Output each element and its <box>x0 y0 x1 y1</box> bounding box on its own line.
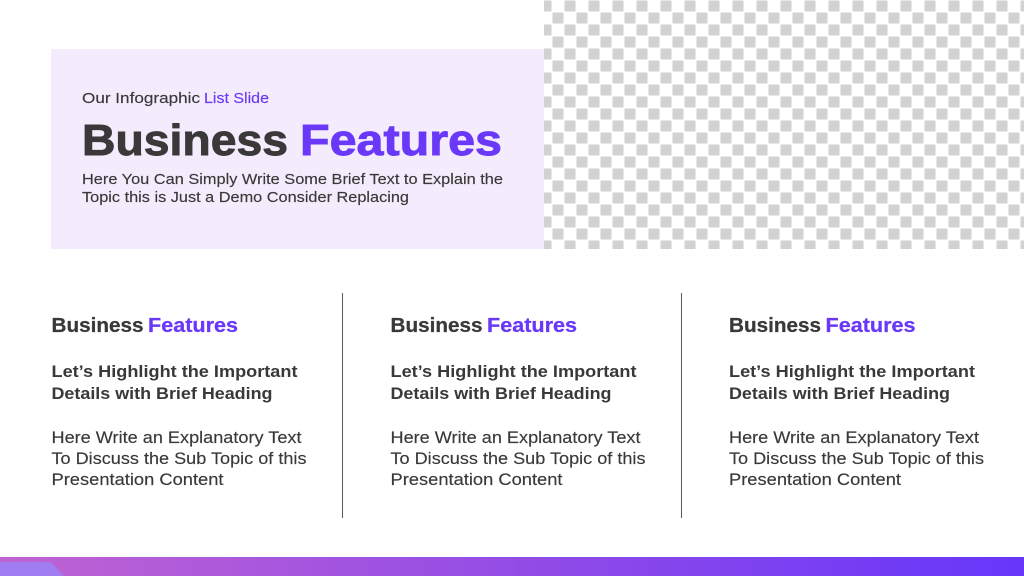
column 2 body text: To Discuss the Sub Topic of this <box>390 450 646 468</box>
divider 2 <box>681 293 682 518</box>
column 3 heading: Business <box>729 315 821 337</box>
eyebrow text: List Slide <box>204 90 269 107</box>
column 2 heading: Features <box>487 315 577 337</box>
column 2 subheading <box>390 363 637 403</box>
column 1 heading: Business <box>52 315 144 337</box>
column 2 body text: Presentation Content <box>390 471 563 489</box>
column 2 subheading: Details with Brief Heading <box>390 385 612 403</box>
column 3 subheading <box>729 363 976 403</box>
column 3 subheading: Details with Brief Heading <box>729 385 950 403</box>
column 2 body text <box>390 429 646 489</box>
column 1 body text: Presentation Content <box>52 471 224 489</box>
column 3 body text: To Discuss the Sub Topic of this <box>729 450 984 468</box>
column 2 subheading: Let’s Highlight the Important <box>390 363 637 381</box>
divider 1 <box>342 293 343 518</box>
column 1 body text: To Discuss the Sub Topic of this <box>52 450 306 468</box>
column 1 subheading: Let’s Highlight the Important <box>52 363 298 381</box>
column 1 subheading <box>52 363 298 403</box>
panel: header <box>51 49 544 249</box>
column 1 subheading: Details with Brief Heading <box>52 385 272 403</box>
column 2 body text: Here Write an Explanatory Text <box>390 429 641 447</box>
checkerboard transparency placeholder <box>544 0 1024 249</box>
description: Topic this is Just a Demo Consider Replacing <box>82 189 409 206</box>
description: Here You Can Simply Write Some Brief Text to Explain the <box>82 171 503 188</box>
column 3 heading: Features <box>826 315 916 337</box>
panel: column 1 <box>52 315 306 489</box>
description <box>82 171 503 206</box>
title: Business <box>82 116 288 165</box>
column 1 body text <box>52 429 306 489</box>
column 1 heading: Features <box>148 315 238 337</box>
title: Features <box>300 116 502 165</box>
column 3 body text <box>729 429 984 489</box>
eyebrow text: Our Infographic <box>82 90 201 107</box>
column 3 body text: Here Write an Explanatory Text <box>729 429 979 447</box>
panel: column 2 <box>390 315 646 489</box>
column 1 body text: Here Write an Explanatory Text <box>52 429 302 447</box>
column 3 body text: Presentation Content <box>729 471 901 489</box>
panel: column 3 <box>729 315 984 489</box>
column 3 subheading: Let’s Highlight the Important <box>729 363 976 381</box>
column 2 heading: Business <box>390 315 482 337</box>
footer gradient bar <box>0 557 1024 576</box>
